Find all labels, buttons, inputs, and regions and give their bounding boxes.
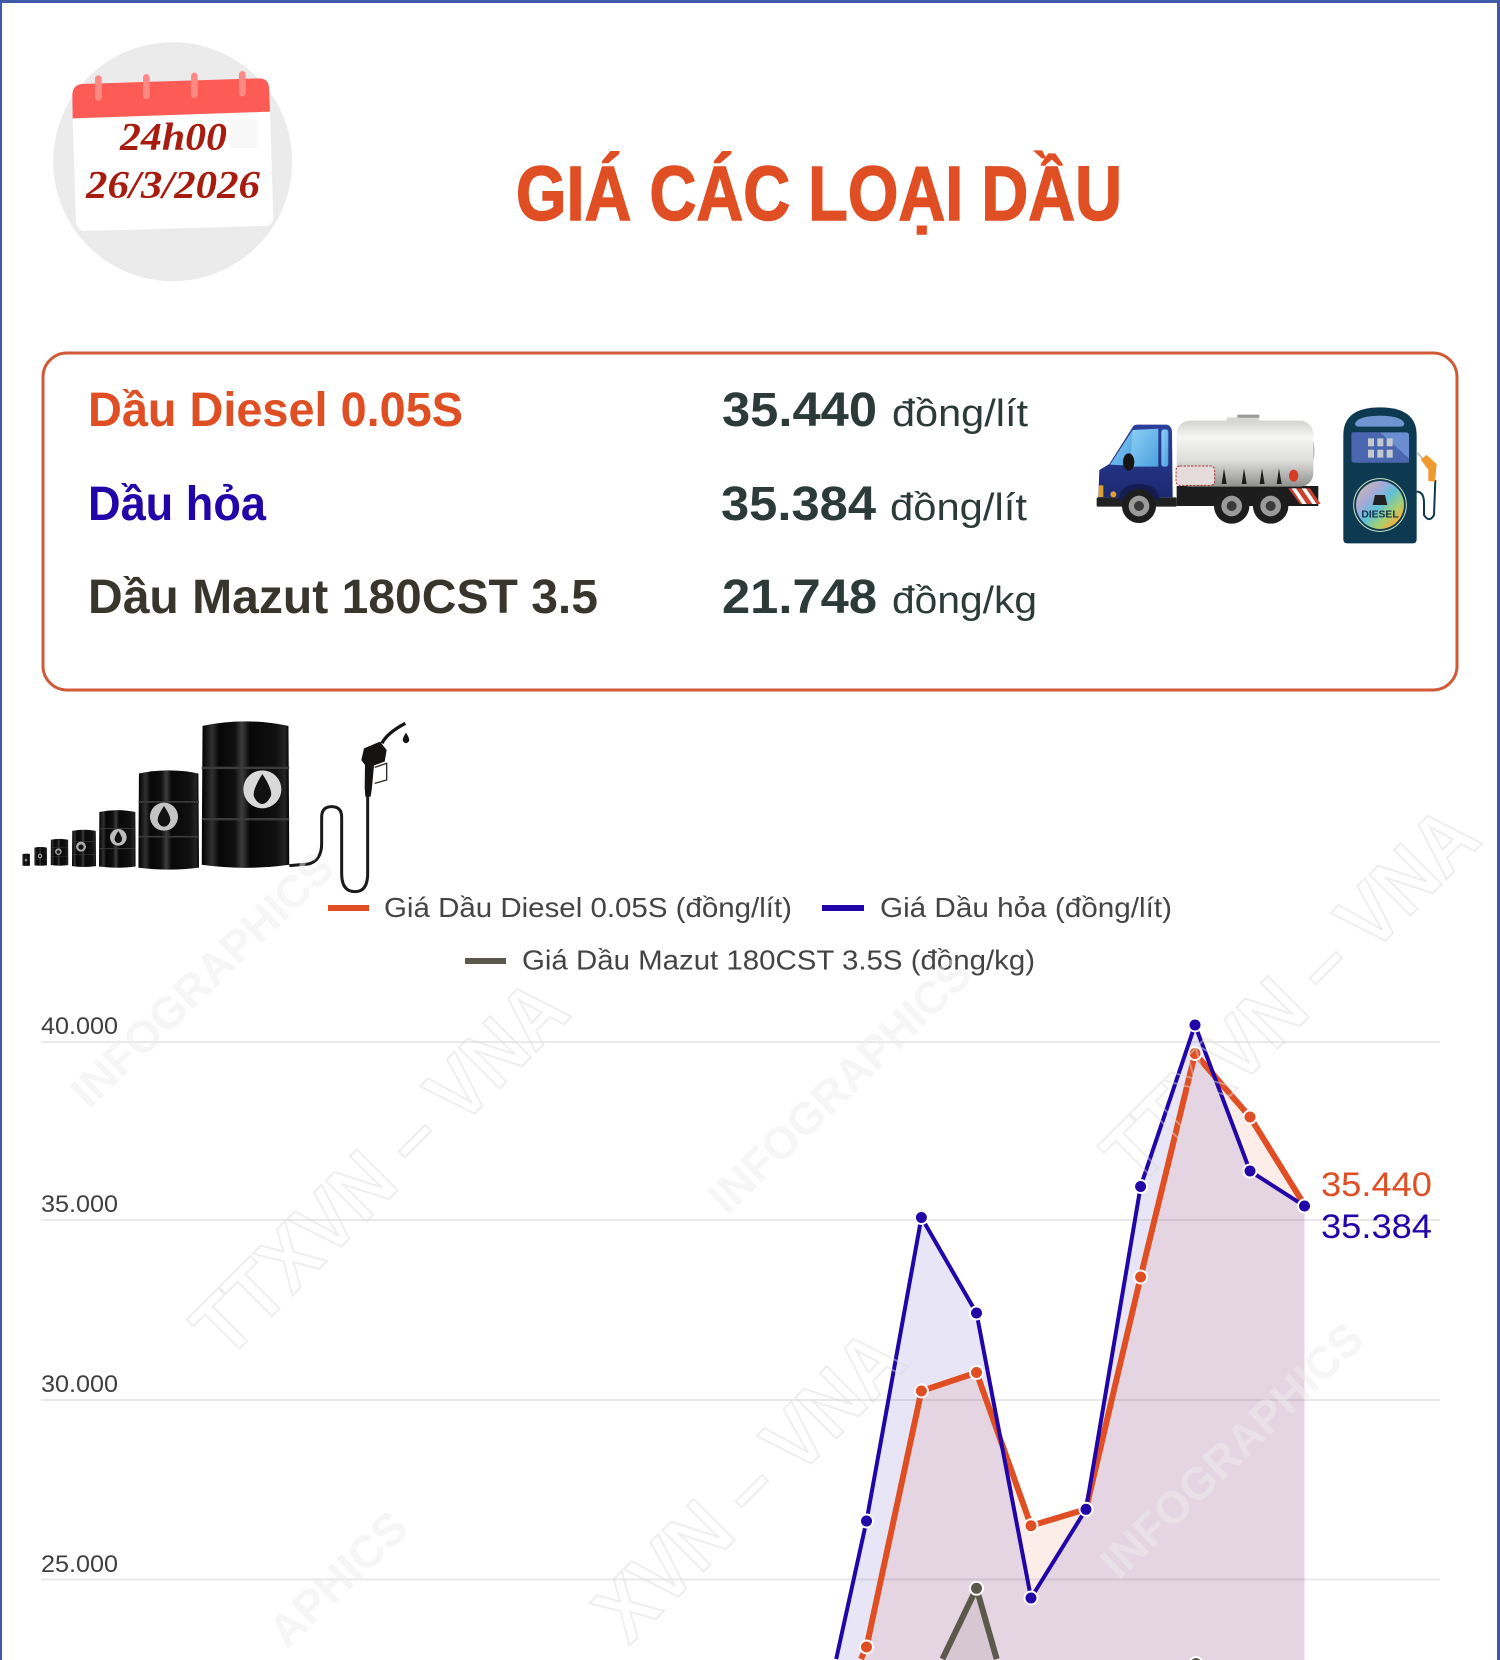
panel: current prices xyxy=(43,353,1457,690)
row: diesel price: đồng/lít xyxy=(892,393,1028,435)
end value labels: 35.384 xyxy=(1321,1208,1432,1246)
date calendar badge: 26/3/2026 xyxy=(85,163,261,206)
chart legend xyxy=(328,892,1172,976)
row: diesel price: 35.440 xyxy=(722,384,877,437)
icon: diesel pump xyxy=(1343,407,1437,543)
series: kerosene xyxy=(836,1018,1311,1659)
row: mazut price: đồng/kg xyxy=(892,580,1037,622)
y axis grid and labels: 30.000 xyxy=(41,1371,118,1398)
y axis grid and labels xyxy=(41,1013,1440,1580)
row: kerosene price: Dầu hỏa xyxy=(88,478,266,531)
y axis grid and labels: 35.000 xyxy=(41,1191,118,1218)
watermarks: INFOGRAPHICS xyxy=(699,948,981,1223)
row: mazut price xyxy=(88,571,1037,624)
watermarks: APHICS xyxy=(259,1501,418,1657)
row: diesel price: Dầu Diesel 0.05S xyxy=(88,384,463,437)
watermarks: INFOGRAPHICS xyxy=(61,842,343,1117)
title: GIÁ CÁC LOẠI DẦU xyxy=(516,150,1122,237)
date calendar badge: 24h00 xyxy=(119,115,227,158)
row: diesel price xyxy=(88,384,1028,437)
watermarks: TTXVN – VNA xyxy=(173,961,586,1374)
row: kerosene price: đồng/lít xyxy=(890,487,1027,529)
row: kerosene price: 35.384 xyxy=(721,478,876,531)
end value labels: 35.440 xyxy=(1321,1166,1432,1204)
line chart: oil prices xyxy=(41,1013,1440,1660)
legend item: mazut: Giá Dầu Mazut 180CST 3.5S (đồng/kg) xyxy=(522,944,1035,976)
y axis grid and labels: 25.000 xyxy=(41,1551,118,1578)
watermarks: INFOGRAPHICS xyxy=(1091,1313,1373,1588)
watermarks: XVN – VNA xyxy=(575,1312,922,1659)
series: mazut xyxy=(942,1582,1203,1660)
row: mazut price: 21.748 xyxy=(722,571,877,624)
series: diesel xyxy=(860,1047,1304,1659)
icon: tanker truck xyxy=(1097,415,1321,524)
legend item: diesel: Giá Dầu Diesel 0.05S (đồng/lít) xyxy=(384,892,792,923)
icon: oil barrels and fuel nozzle xyxy=(22,721,409,892)
area fills under the series xyxy=(836,1025,1304,1660)
legend item: kerosene: Giá Dầu hỏa (đồng/lít) xyxy=(880,892,1172,923)
end value labels xyxy=(1321,1166,1432,1246)
date calendar badge xyxy=(53,42,292,281)
icon: diesel pump: DIESEL xyxy=(1361,509,1399,520)
y axis grid and labels: 40.000 xyxy=(41,1013,118,1040)
watermarks xyxy=(61,788,1497,1659)
row: mazut price: Dầu Mazut 180CST 3.5 xyxy=(88,571,598,624)
row: kerosene price xyxy=(88,478,1027,531)
